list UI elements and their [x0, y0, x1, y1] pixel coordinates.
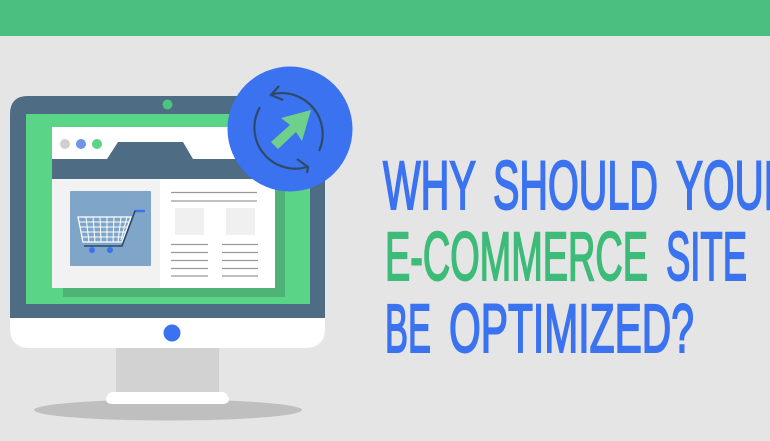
left product panel — [52, 179, 160, 288]
monitor bezel — [10, 96, 325, 318]
power button — [164, 324, 180, 342]
browser dots — [60, 139, 102, 149]
title line 3: BE — [385, 290, 431, 367]
title — [383, 147, 770, 367]
stand base — [106, 392, 229, 404]
icon: shopping cart — [78, 211, 145, 253]
refresh arrows — [254, 86, 323, 173]
monitor chin — [10, 318, 325, 348]
screen — [26, 114, 310, 304]
monitor stand — [116, 346, 219, 393]
illustration: desktop monitor — [10, 96, 325, 420]
monitor shadow — [34, 400, 302, 420]
icon: optimization badge — [228, 66, 352, 192]
growth arrow — [271, 110, 311, 149]
browser window — [52, 127, 275, 288]
browser tab bar — [52, 142, 275, 179]
camera dot — [162, 100, 172, 110]
title line 1: WHY — [383, 147, 476, 224]
browser shadow — [63, 178, 285, 297]
product image — [70, 191, 151, 266]
text lines and thumbnails — [171, 192, 258, 276]
title line 3 — [385, 290, 694, 367]
top green band — [0, 0, 770, 36]
